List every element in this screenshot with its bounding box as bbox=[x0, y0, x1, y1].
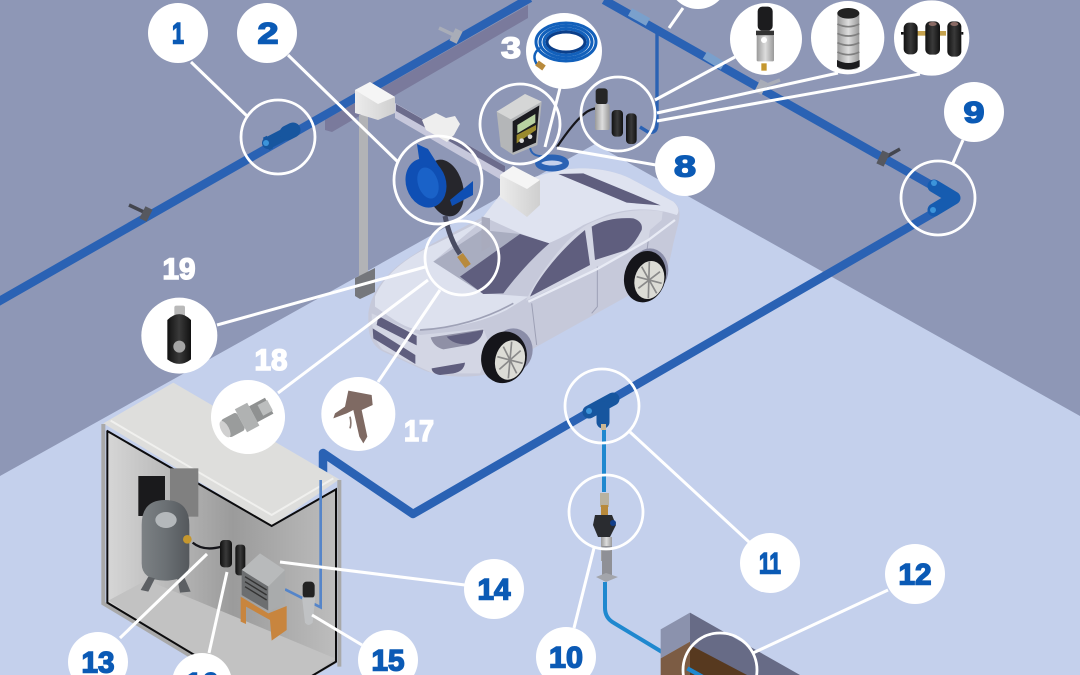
tee fitting bbox=[586, 399, 613, 430]
wooden stand bbox=[241, 597, 287, 641]
tank hose bbox=[193, 543, 222, 548]
filter one bbox=[220, 540, 232, 567]
badge 11 bbox=[740, 533, 800, 593]
label 3: 3 bbox=[501, 32, 521, 65]
rear wheel bbox=[618, 246, 672, 307]
hood crease bbox=[420, 303, 513, 330]
floor bbox=[0, 144, 1080, 675]
drop stand bbox=[596, 537, 618, 582]
car bbox=[368, 168, 680, 388]
elbow fitting bbox=[930, 180, 954, 213]
black air hose bbox=[557, 108, 604, 147]
underground feed hose bbox=[605, 582, 662, 652]
coil fitting bbox=[537, 63, 544, 68]
clamp left bbox=[129, 205, 149, 220]
coil tail bbox=[534, 48, 540, 66]
car roof bbox=[483, 168, 678, 243]
air treatment unit bbox=[595, 88, 637, 144]
icon: nozzle adapter bbox=[141, 298, 217, 374]
display bbox=[517, 114, 535, 133]
badge 1 bbox=[148, 3, 208, 63]
badge 15 bbox=[358, 630, 418, 675]
blue line bbox=[285, 480, 321, 607]
main pipe: floor run bbox=[323, 212, 935, 514]
window frame bbox=[526, 210, 663, 301]
clamp top bbox=[439, 28, 459, 42]
label 17: 17 bbox=[404, 415, 434, 448]
badge 8 bbox=[655, 136, 715, 196]
badge 10: 10 bbox=[549, 642, 583, 674]
flexible hose with fitting bbox=[445, 216, 468, 266]
panel band bbox=[517, 125, 536, 143]
badge 13 bbox=[68, 632, 128, 675]
enclosure frame bbox=[103, 424, 339, 675]
car bumper bbox=[372, 313, 490, 373]
icon: quick coupling bbox=[198, 367, 298, 467]
trench bbox=[661, 613, 800, 675]
label 19: 19 bbox=[162, 253, 196, 286]
badge 12 bbox=[885, 544, 945, 604]
rear side window bbox=[592, 218, 642, 260]
hose reel support post bbox=[355, 115, 375, 299]
rail bbox=[395, 103, 505, 182]
control panel bbox=[513, 105, 539, 153]
icon: filter cartridge bbox=[811, 1, 884, 74]
car body bbox=[368, 168, 680, 377]
air hose coil on wall bbox=[530, 146, 566, 168]
badge 16 bbox=[172, 653, 232, 675]
white bracket bbox=[422, 113, 460, 142]
icon: blow gun bbox=[321, 377, 395, 451]
light pipe sections bbox=[630, 12, 723, 66]
drop pipe with filters feed bbox=[640, 30, 657, 132]
enclosure wall bbox=[107, 431, 336, 675]
drain filter bbox=[302, 582, 315, 625]
lower grille bbox=[373, 328, 415, 364]
icon: regulator bbox=[730, 3, 802, 75]
badge 1: 1 bbox=[172, 18, 184, 50]
car hood bbox=[375, 220, 528, 330]
badge 14: 14 bbox=[478, 574, 511, 606]
compressor enclosure bbox=[103, 383, 339, 675]
icon: filter trio bbox=[894, 0, 969, 76]
air tank bbox=[141, 500, 192, 593]
overhead beam bbox=[325, 5, 528, 132]
coil rings bbox=[536, 23, 596, 61]
filter two bbox=[235, 545, 245, 575]
detail rings bbox=[241, 77, 975, 675]
dryer bbox=[242, 553, 285, 612]
badge 2: 2 bbox=[258, 18, 278, 50]
icon: hose coil bbox=[526, 13, 602, 89]
enclosure top bbox=[103, 383, 339, 526]
badge 11: 11 bbox=[759, 548, 781, 580]
badge 14 bbox=[464, 559, 524, 619]
clamp dark bbox=[880, 149, 900, 165]
drop valve bbox=[593, 493, 616, 537]
leader lines bbox=[120, 8, 963, 653]
front wheel arch bbox=[494, 328, 533, 372]
right junction box bbox=[500, 166, 540, 217]
fog lamp bbox=[432, 363, 465, 375]
control unit bbox=[497, 94, 542, 155]
left junction box bbox=[355, 82, 395, 120]
front side window bbox=[530, 230, 590, 297]
badge 12: 12 bbox=[898, 558, 932, 592]
front wheel bbox=[475, 326, 533, 388]
label 18: 18 bbox=[254, 344, 288, 377]
main pipe: left wall bbox=[0, 0, 530, 303]
badge 2 bbox=[237, 3, 297, 63]
upper grille bbox=[377, 316, 417, 345]
door lines bbox=[532, 240, 648, 345]
badge 9 bbox=[944, 82, 1004, 142]
badge 9: 9 bbox=[964, 96, 984, 130]
enclosure outline bbox=[107, 431, 336, 675]
post base bbox=[355, 268, 375, 299]
clamp light bbox=[758, 80, 780, 93]
headlight bbox=[431, 329, 483, 349]
connection hose to drop point bbox=[602, 430, 606, 492]
badge 10 bbox=[536, 627, 596, 675]
coupling bbox=[263, 130, 293, 146]
sunroof bbox=[558, 173, 661, 205]
hose reel bbox=[399, 144, 473, 221]
main pipe: right wall bbox=[604, 0, 940, 190]
rear wheel arch bbox=[632, 248, 668, 292]
windshield bbox=[433, 217, 549, 294]
badge 8: 8 bbox=[674, 150, 696, 184]
enclosure floor bbox=[108, 580, 335, 675]
belt highlight bbox=[528, 220, 675, 302]
compressor head bbox=[138, 468, 198, 517]
badge top unlabelled bbox=[668, 0, 728, 9]
